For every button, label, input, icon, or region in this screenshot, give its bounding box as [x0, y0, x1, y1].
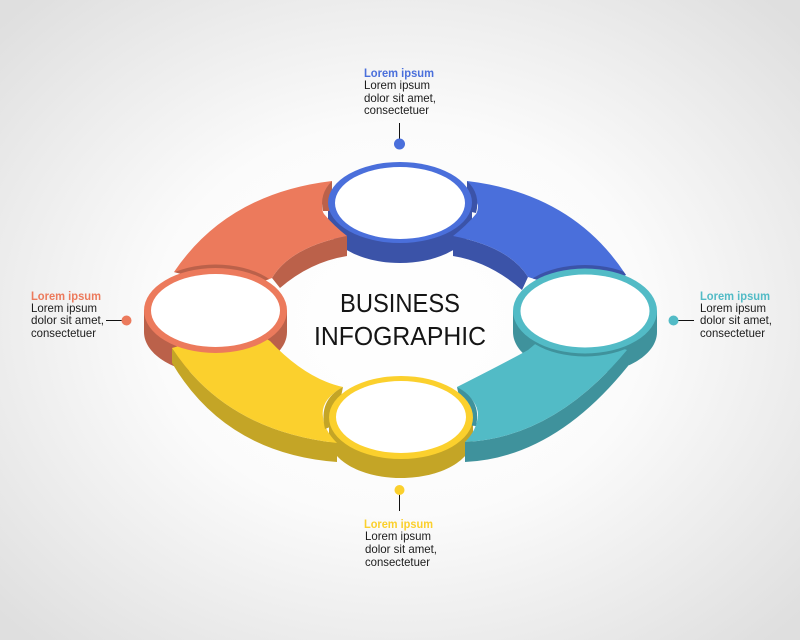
- cylinder side: yellow node: [329, 417, 473, 478]
- cylinder side: orange node: [144, 310, 287, 374]
- callout: right teal: dolor sit amet,: [700, 313, 772, 327]
- segment: yellow arrow: [172, 335, 343, 462]
- callout: top blue: [364, 66, 436, 150]
- callout: right teal: consectetuer: [700, 326, 765, 340]
- node: blue: [328, 162, 472, 243]
- node: yellow: [329, 376, 473, 459]
- callout: right teal: Lorem ipsum: [700, 301, 766, 315]
- callout: bottom yellow: Lorem ipsum: [364, 517, 433, 531]
- title: BUSINESS: [340, 288, 460, 318]
- callout: left orange: [31, 289, 132, 340]
- callout: left orange: consectetuer: [31, 326, 96, 340]
- title: [314, 288, 486, 351]
- node: orange: [144, 268, 287, 353]
- callout: left orange: Lorem ipsum: [31, 301, 97, 315]
- segment: blue arrow: [453, 181, 626, 290]
- node: teal: [513, 268, 657, 354]
- callout: left orange: Lorem ipsum: [31, 289, 101, 303]
- segment: teal arrow: [457, 272, 656, 462]
- callout: left orange: dolor sit amet,: [31, 313, 104, 327]
- cylinder side: blue node: [328, 203, 472, 263]
- callout: bottom yellow: dolor sit amet,: [365, 542, 437, 556]
- callout: top blue: consectetuer: [364, 103, 429, 117]
- callout: top blue: dolor sit amet,: [364, 91, 436, 105]
- segment: orange arrow: [174, 181, 347, 288]
- callout: bottom yellow: consectetuer: [365, 555, 430, 569]
- callout: right teal: Lorem ipsum: [700, 289, 770, 303]
- callout: top blue: Lorem ipsum: [364, 78, 430, 92]
- callout: bottom yellow: Lorem ipsum: [365, 529, 431, 543]
- callout: bottom yellow: [364, 485, 437, 569]
- cylinder side: teal node: [513, 311, 657, 374]
- title: INFOGRAPHIC: [314, 321, 486, 351]
- callout: right teal: [668, 289, 772, 340]
- callout: top blue: Lorem ipsum: [364, 66, 434, 80]
